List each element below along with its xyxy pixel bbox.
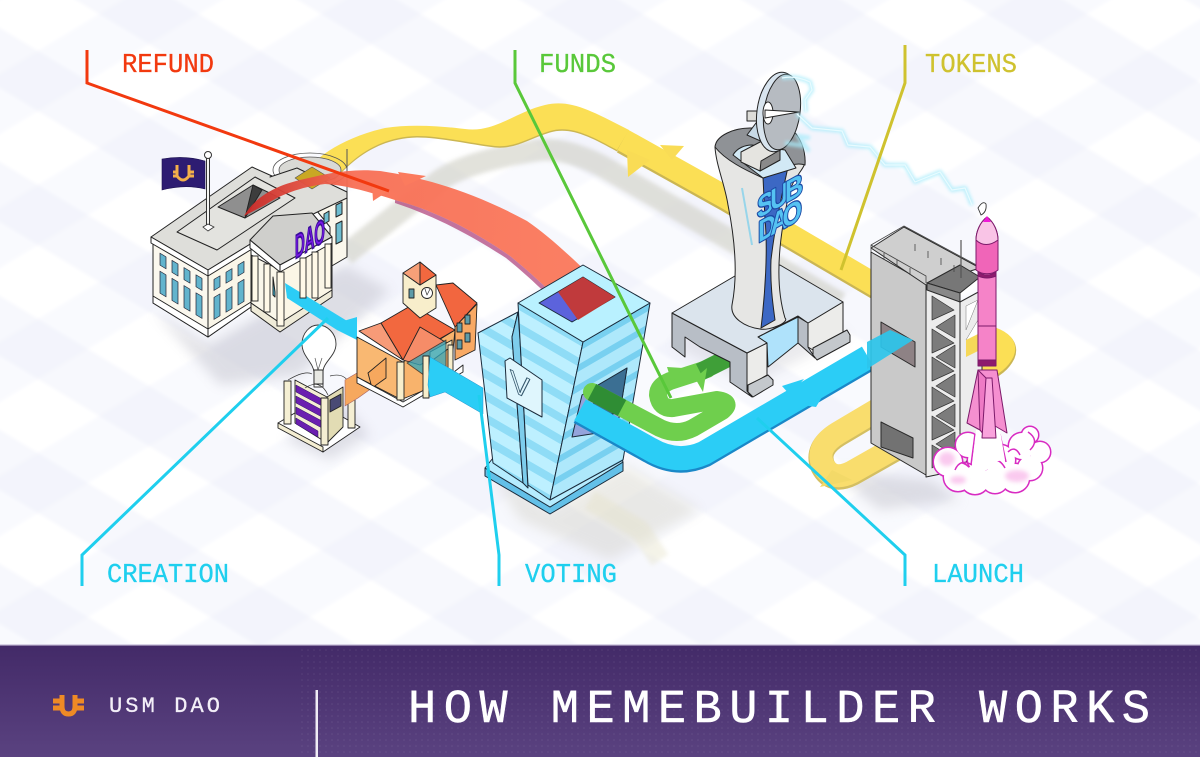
label: refund: REFUND <box>122 51 214 81</box>
portico columns <box>252 244 331 326</box>
tower body <box>715 125 805 329</box>
subdao tower <box>672 69 850 397</box>
roof opening <box>539 277 615 322</box>
divider <box>316 690 318 757</box>
roof <box>359 323 403 360</box>
back wing <box>436 283 477 360</box>
SUB DAO label: DAO <box>758 192 802 250</box>
blue arrow barbs <box>782 379 822 407</box>
voting tower <box>478 265 650 514</box>
school <box>357 262 477 407</box>
orange tunnel bulb to school <box>345 356 386 406</box>
roof <box>151 167 347 276</box>
label: funds: FUNDS <box>539 51 616 81</box>
front wall windows <box>214 261 244 319</box>
ground shadows <box>153 150 960 560</box>
main title: HOW MEMEBUILDER WORKS <box>408 684 1150 737</box>
tower doorways <box>881 322 915 367</box>
blue launch path <box>580 357 868 460</box>
light bulb <box>302 325 336 387</box>
green arrow barbs <box>667 367 707 392</box>
callout line: refund <box>87 50 389 191</box>
red arrow barbs <box>372 172 426 201</box>
fairing <box>976 217 998 274</box>
V sign: V <box>510 363 531 407</box>
launch tower <box>871 226 982 477</box>
yellow roof opening <box>295 167 330 189</box>
V sign <box>505 358 542 417</box>
left wing <box>478 312 523 483</box>
callout line: creation <box>82 318 328 586</box>
label: creation: CREATION <box>107 561 229 591</box>
footer band <box>0 644 1200 757</box>
flag <box>162 152 214 231</box>
plinth <box>485 462 623 514</box>
base <box>672 265 850 397</box>
rocket smoke <box>934 427 1050 494</box>
blue path school to voting <box>428 357 483 414</box>
front wall <box>871 252 926 475</box>
teal door pane <box>407 340 446 378</box>
front left face <box>518 303 583 500</box>
white house <box>151 149 347 337</box>
door <box>572 368 627 437</box>
callout line: tokens <box>841 45 905 270</box>
bulb pedestal <box>278 325 360 452</box>
right face <box>550 303 650 500</box>
yellow tokens ribbon lower loop <box>820 408 905 487</box>
SUB DAO label: SUB <box>757 167 803 226</box>
callout line: funds <box>515 50 671 398</box>
label: tokens: TOKENS <box>925 51 1017 81</box>
callout line: launch <box>757 418 905 586</box>
scaffold triangles <box>932 296 955 468</box>
lower body <box>978 272 996 362</box>
main walls <box>153 240 251 337</box>
red arc entering roof <box>558 277 615 320</box>
blue path house to school <box>285 283 357 340</box>
left wall windows <box>160 253 202 318</box>
clock tower <box>403 262 436 318</box>
red refund arc <box>244 170 612 323</box>
fins <box>967 370 1007 433</box>
back wing <box>273 149 347 267</box>
dish <box>747 115 772 142</box>
top <box>518 265 650 342</box>
label: voting: VOTING <box>525 561 617 591</box>
yellow tokens ribbon upper <box>300 103 1004 374</box>
callout line: voting <box>479 395 499 586</box>
blue path entering launch tower <box>867 330 913 369</box>
satellite <box>978 203 986 215</box>
lightning beam <box>782 77 972 205</box>
portico <box>250 213 332 332</box>
label: launch: LAUNCH <box>932 561 1024 591</box>
top collar <box>715 128 805 178</box>
DAO sign: DAO <box>295 210 325 267</box>
yellow peeking through scaffold <box>966 333 980 357</box>
logo mark <box>53 695 84 714</box>
roof <box>871 227 980 285</box>
rocket <box>967 203 1007 438</box>
yellow arrow barbs <box>627 145 684 177</box>
brand name: USM DAO <box>109 694 220 719</box>
purple code panel <box>296 385 322 437</box>
green funds path <box>592 358 728 432</box>
